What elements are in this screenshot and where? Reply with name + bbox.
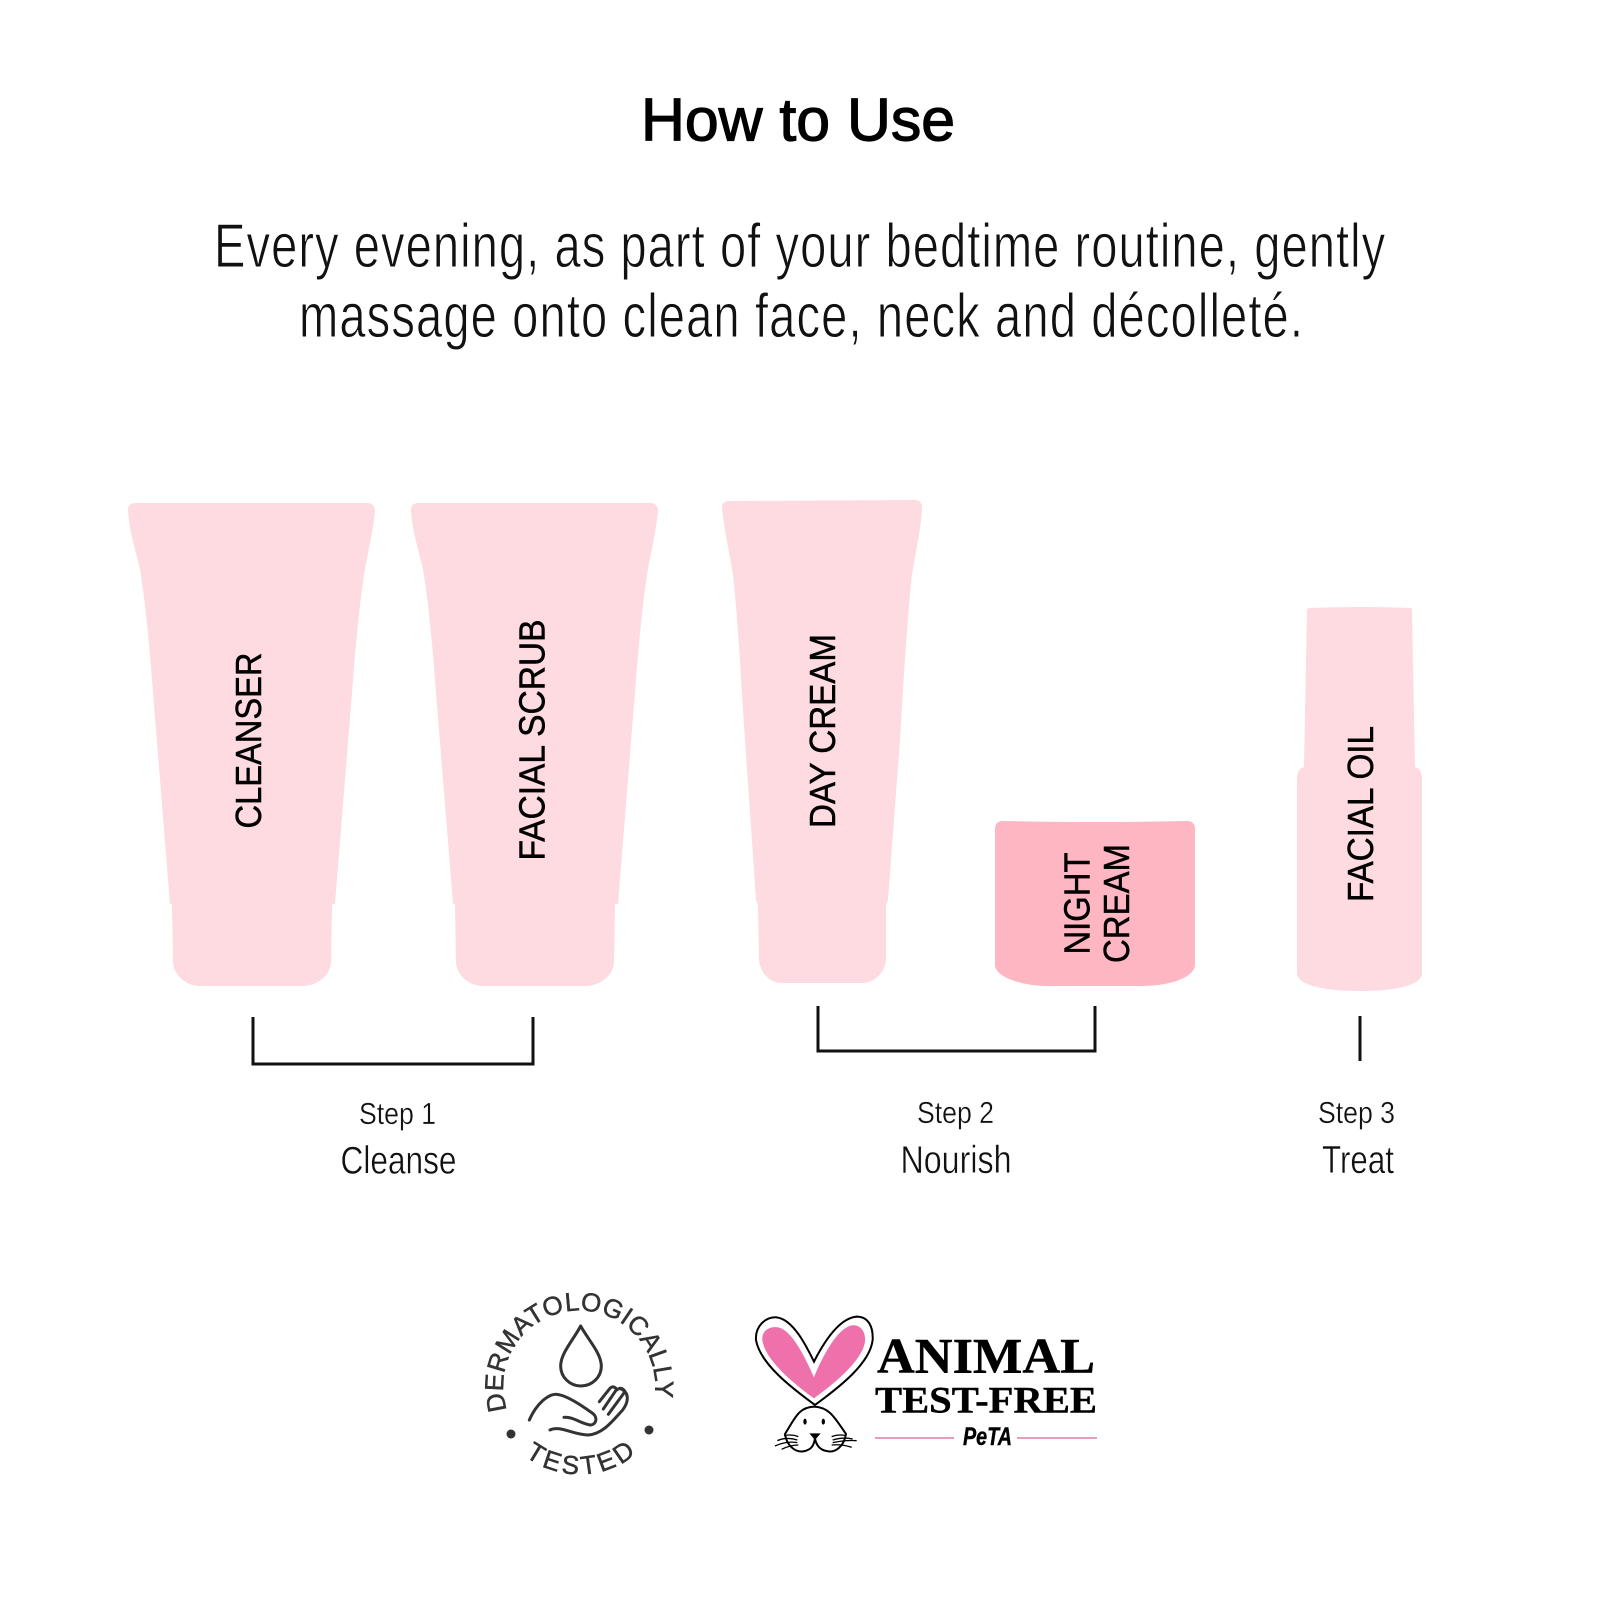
- intro text: massage onto clean face, neck and décolleté.: [299, 281, 1303, 351]
- product: facial oil bottle: [1297, 607, 1422, 991]
- step 2 label: Step 2: [917, 1095, 994, 1130]
- badge: peta animal test-free: PeTA: [963, 1423, 1012, 1451]
- product: day cream tube: DAY CREAM: [802, 634, 843, 828]
- badge: peta animal test-free: [756, 1317, 1097, 1451]
- step 3 label: [1318, 1095, 1395, 1182]
- product: night cream jar: CREAM: [1096, 844, 1137, 963]
- step 2 label: [900, 1095, 1012, 1182]
- product: facial scrub tube: [411, 503, 658, 986]
- product: cleanser tube: CLEANSER: [228, 652, 269, 828]
- step 1 label: Cleanse: [340, 1140, 456, 1182]
- product: night cream jar: NIGHT: [1056, 852, 1098, 954]
- badge: dermatologically tested: [484, 1292, 674, 1474]
- title: How to Use: [641, 86, 955, 154]
- product: night cream jar: [995, 821, 1195, 986]
- icon: water drop and hand: [529, 1326, 627, 1435]
- product: cleanser tube: [128, 503, 375, 986]
- product: facial scrub tube: FACIAL SCRUB: [512, 620, 552, 860]
- bracket: step 3: [1358, 1016, 1362, 1061]
- icon: bunny: [756, 1317, 873, 1451]
- intro text: [214, 211, 1386, 351]
- bracket: step 1: [253, 1017, 533, 1064]
- product: facial oil bottle: FACIAL OIL: [1340, 726, 1381, 902]
- product: day cream tube: [722, 500, 922, 983]
- intro text: Every evening, as part of your bedtime routine, gently: [214, 211, 1386, 281]
- bracket: step 2: [818, 1006, 1095, 1051]
- step 3 label: Treat: [1322, 1139, 1394, 1182]
- step 3 label: Step 3: [1318, 1095, 1395, 1130]
- badge: peta animal test-free: TEST-FREE: [875, 1381, 1097, 1422]
- text: animal test-free: ANIMAL: [877, 1328, 1095, 1384]
- step 1 label: Step 1: [359, 1096, 436, 1131]
- step 2 label: Nourish: [900, 1139, 1012, 1182]
- step 1 label: [340, 1096, 456, 1182]
- badge: dermatologically tested: TESTED: [530, 1441, 632, 1474]
- badge: dermatologically tested: DERMATOLOGICALLY: [484, 1292, 674, 1412]
